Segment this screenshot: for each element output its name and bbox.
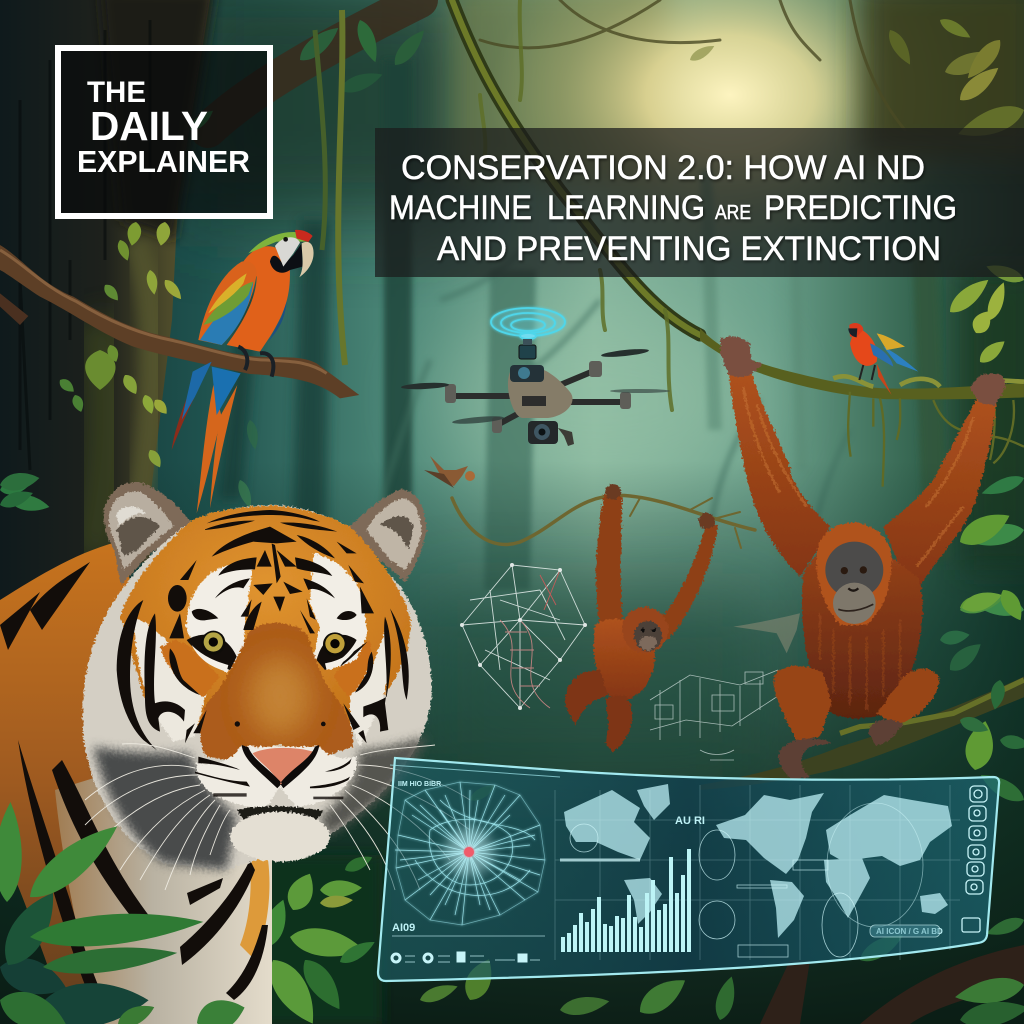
orangutan hands and feet (720, 337, 762, 377)
muzzle (196, 747, 357, 807)
side icon buttons (962, 786, 987, 932)
large macaw (172, 230, 314, 513)
right side leaves (939, 307, 1024, 773)
macaw perch branch (0, 245, 359, 398)
orangutan torso (802, 553, 923, 718)
nose (253, 748, 313, 785)
world maps (564, 784, 952, 938)
foreground leaves (0, 802, 249, 1024)
tiger head and ears (83, 482, 432, 870)
lower foliage and trunks (418, 781, 1024, 1024)
title text (389, 149, 957, 268)
small orangutan legs (565, 670, 608, 725)
title band (375, 128, 1024, 277)
title text: ARE (715, 202, 751, 224)
tiger body (0, 540, 150, 1024)
title text: PREDICTING (764, 189, 957, 227)
title text: LEARNING (547, 189, 705, 227)
orangutan thighs (774, 666, 832, 742)
ruff (83, 505, 432, 870)
dashboard glass panel (378, 758, 999, 981)
title text: CONSERVATION 2.0: HOW AI ND (401, 149, 925, 187)
distant ghost animal (733, 613, 800, 653)
small macaw (848, 323, 918, 395)
chin (230, 812, 330, 862)
orangutan right arm (883, 395, 997, 587)
upper branch (700, 328, 1024, 399)
thin hanging branch (452, 495, 755, 548)
logo text: THE (87, 76, 146, 109)
data sketch (650, 670, 778, 760)
left ear (103, 482, 192, 585)
orangutan face (825, 542, 883, 624)
eye patches white (186, 563, 253, 673)
whiskers (85, 744, 470, 890)
small orangutan head (622, 607, 668, 653)
signal arcs (491, 308, 565, 339)
hanging moss (848, 392, 1024, 487)
panel labels (392, 781, 943, 936)
nose bridge (200, 623, 353, 763)
panel labels: AU RI (675, 815, 705, 827)
tiger (0, 482, 470, 1024)
map detail lines (555, 785, 960, 960)
trunk ivy leaves (0, 107, 260, 514)
right ear (350, 489, 427, 582)
main tree trunk (0, 0, 345, 620)
top canopy branches (208, 0, 905, 130)
logo text: EXPLAINER (77, 144, 250, 179)
small bird (424, 456, 475, 488)
orangutan left arm (728, 372, 830, 577)
small orangutan body (594, 619, 655, 700)
logo text (77, 76, 250, 179)
orange band (120, 506, 410, 737)
lower branch (700, 677, 1024, 790)
large orangutan (720, 337, 1005, 780)
logo text: DAILY (90, 103, 208, 149)
macaw head (248, 232, 312, 253)
title text: AND PREVENTING EXTINCTION (437, 230, 941, 268)
orangutan hair (816, 523, 892, 625)
panel labels: AI ICON / G AI BD (876, 927, 943, 936)
macaw feet (238, 347, 273, 377)
body stripes (0, 562, 268, 1000)
foreground foliage behind tiger neck (257, 852, 382, 1024)
drone camera (528, 421, 558, 444)
forehead and face stripes (117, 510, 409, 799)
panel footer icons (392, 936, 545, 962)
eyes (192, 631, 357, 672)
small orangutan (565, 484, 718, 752)
macaw body (227, 246, 290, 352)
drone (401, 308, 670, 446)
neural network wireframe (460, 563, 587, 710)
drone arms (450, 370, 628, 425)
logo box (55, 45, 273, 219)
drone body (508, 366, 573, 418)
drone motors and rotors (401, 348, 670, 433)
bar chart (561, 849, 691, 952)
dashboard (378, 758, 999, 981)
cheek white (133, 617, 208, 742)
long mossy vine branch (452, 0, 700, 410)
network graph (395, 782, 545, 925)
orangutan branches and right foliage (700, 328, 1024, 790)
panel labels: IIM HIO BIBR (398, 781, 441, 788)
macaw wing (198, 261, 257, 345)
panel labels: AI09 (392, 922, 415, 934)
small orangutan arms (596, 494, 625, 640)
title text: MACHINE (389, 189, 532, 227)
